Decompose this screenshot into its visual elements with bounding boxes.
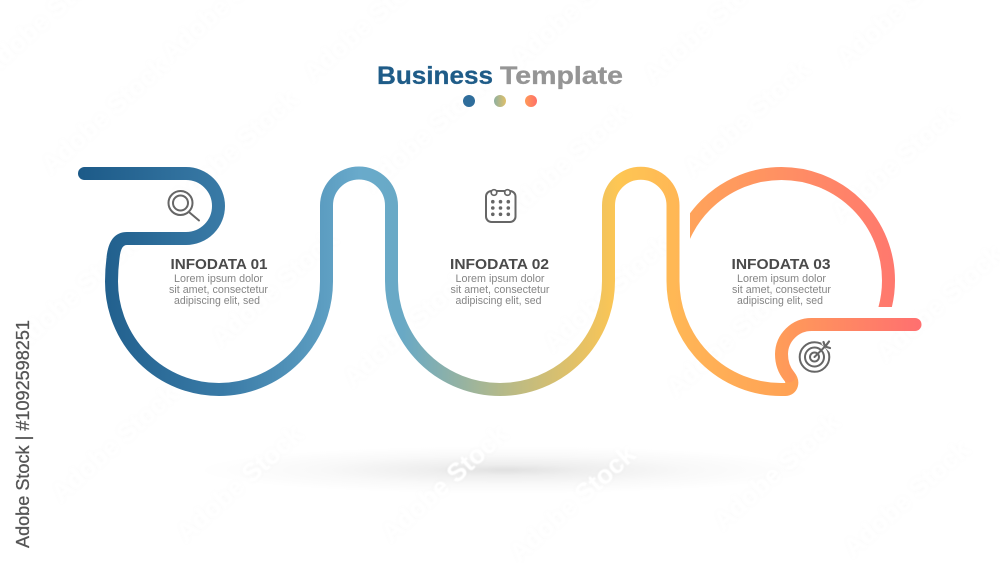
icon: calendar (486, 190, 516, 222)
stock watermark pattern: Adobe Stock (45, 379, 183, 508)
stock watermark pattern: Adobe Stock (837, 434, 975, 563)
stock watermark pattern: Adobe Stock (205, 224, 343, 353)
stock watermark pattern: Adobe Stock (825, 99, 963, 228)
stock watermark pattern: Adobe Stock (35, 51, 173, 180)
stock watermark pattern: Adobe Stock (707, 407, 845, 536)
icon: target with arrow (800, 342, 832, 372)
stock watermark pattern: Adobe Stock (165, 84, 303, 213)
block: infodata 01 (169, 257, 268, 307)
block: infodata 02: INFODATA 02 (450, 257, 549, 273)
block: infodata 02: Lorem ipsum dolor (456, 273, 545, 285)
block: infodata 02: adipiscing elit, sed (456, 295, 542, 307)
icon: magnifying glass (168, 191, 199, 220)
block: infodata 01: sit amet, consectetur (169, 284, 268, 296)
winding ribbon line (84, 173, 915, 390)
ribbon: open circle arc (690, 167, 895, 307)
stock watermark pattern: Adobe Stock (170, 419, 308, 548)
block: infodata 01: INFODATA 01 (170, 257, 268, 273)
stock watermark pattern: Adobe Stock (337, 264, 475, 393)
ribbon: final section to the right end (782, 324, 915, 376)
block: infodata 03: sit amet, consectetur (732, 284, 831, 296)
title: Template (500, 62, 623, 90)
block: infodata 01: Lorem ipsum dolor (174, 273, 263, 285)
title dots (463, 95, 537, 107)
block: infodata 03 (732, 257, 831, 307)
block: infodata 03: adipiscing elit, sed (737, 295, 823, 307)
stock watermark pattern: Adobe Stock (677, 54, 815, 183)
title (377, 62, 623, 90)
ribbon: main section through the three loops (84, 173, 792, 390)
stock watermark pattern: Adobe Stock (497, 97, 635, 226)
block: infodata 01: adipiscing elit, sed (174, 295, 260, 307)
block: infodata 03: Lorem ipsum dolor (737, 273, 826, 285)
block: infodata 02 (450, 257, 550, 307)
adobe stock id label: Adobe Stock | #1092598251 (13, 320, 33, 548)
stock watermark pattern: Adobe Stock (660, 274, 798, 403)
stock watermark pattern: Adobe Stock (357, 69, 495, 198)
stock watermark pattern: Adobe Stock (537, 229, 675, 358)
block: infodata 02: sit amet, consectetur (450, 284, 550, 296)
stock watermark pattern: Adobe Stock (375, 419, 513, 548)
ground shadow (195, 446, 815, 494)
title: Business (377, 62, 493, 90)
block: infodata 03: INFODATA 03 (732, 257, 830, 273)
stock watermark pattern: Adobe Stock (5, 229, 143, 358)
